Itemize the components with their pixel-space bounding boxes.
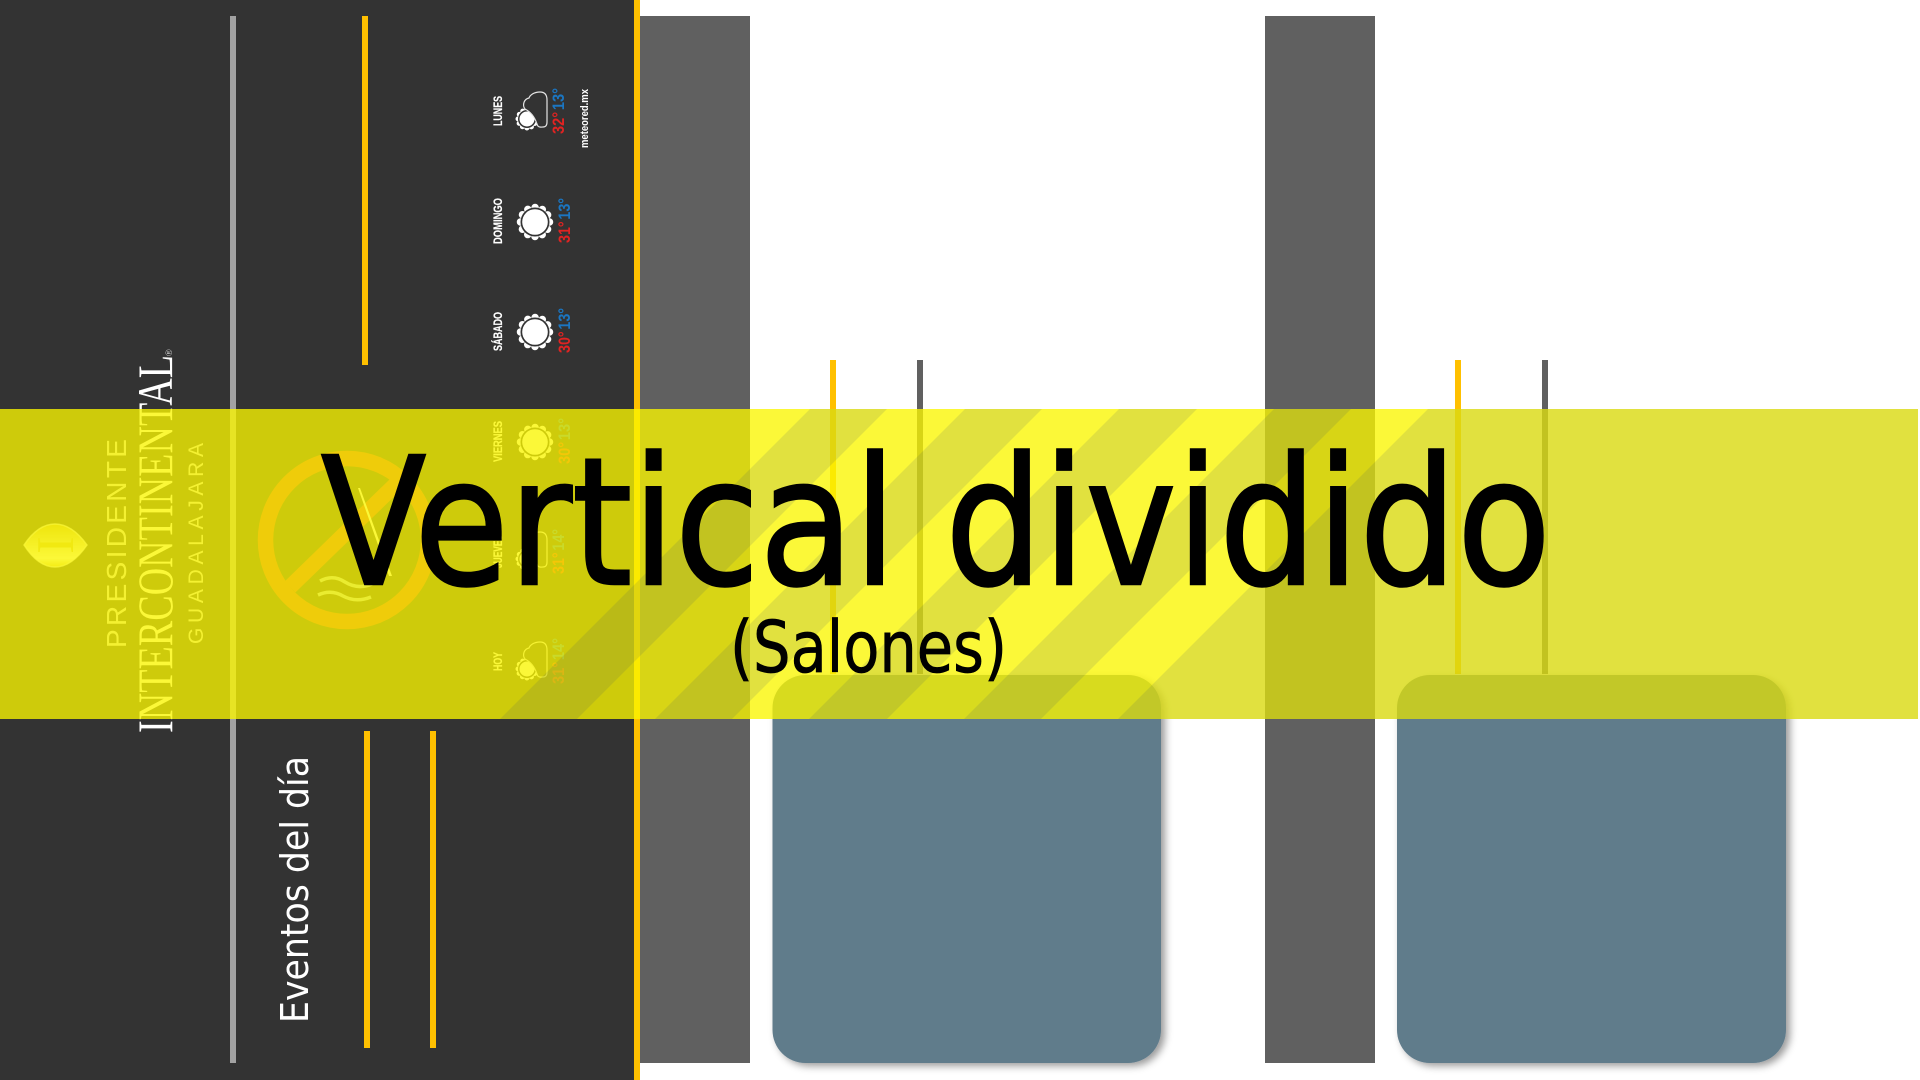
logo registered mark: ®	[164, 349, 174, 356]
subtitle: (Salones)	[730, 606, 1007, 689]
title: Vertical dividido	[321, 420, 1551, 626]
card: right hall	[1397, 675, 1786, 1063]
panel: grey column left	[640, 16, 750, 1063]
card: left hall	[772, 675, 1161, 1063]
weather: jueves: JUEVES	[491, 535, 505, 568]
line: left hall orange	[830, 360, 836, 674]
panel: grey column right	[1265, 16, 1375, 1063]
sidebar orange edge	[634, 0, 640, 1080]
weather: viernes	[491, 418, 574, 464]
panel: left dark sidebar	[0, 0, 634, 1080]
weather: sabado: 30°13°	[556, 308, 574, 353]
sidebar accent line bottom right	[430, 731, 436, 1048]
source: meteored: meteored.mx	[579, 88, 591, 148]
weather: hoy: HOY	[491, 652, 505, 671]
icon: logo emblem	[24, 524, 87, 567]
banner: translucent yellow band with stripes	[0, 409, 1918, 719]
line: left hall grey	[917, 360, 923, 674]
weather: jueves: 31°14°	[550, 529, 568, 574]
weather: lunes: 32°13°	[550, 88, 568, 134]
line: right hall grey	[1542, 360, 1548, 674]
logo text: presidente: PRESIDENTE	[101, 439, 132, 648]
weather: hoy	[491, 638, 568, 684]
weather: viernes: 30°13°	[556, 418, 574, 464]
weather: viernes: VIERNES	[491, 421, 505, 462]
sidebar divider line grey	[230, 16, 236, 1063]
weather: sabado: SÁBADO	[490, 312, 505, 351]
weather: jueves	[491, 529, 568, 574]
hotel logo	[24, 349, 208, 733]
weather: hoy: 31°14°	[550, 638, 568, 684]
weather: domingo: DOMINGO	[491, 198, 505, 244]
weather: lunes	[491, 88, 568, 134]
weather: lunes: LUNES	[491, 96, 505, 126]
icon: prohibition sign	[266, 458, 428, 622]
weather: sabado	[490, 308, 574, 353]
sidebar accent line bottom left	[364, 731, 370, 1048]
heading: eventos del dia: Eventos del día	[273, 756, 317, 1023]
icon: logo emblem: I	[27, 536, 85, 554]
line: right hall orange	[1455, 360, 1461, 674]
weather: domingo	[491, 198, 574, 244]
logo text: guadalajara: GUADALAJARA	[185, 443, 208, 644]
logo text: intercontinental: INTERCONTINENTAL	[127, 355, 183, 733]
weather: domingo: 31°13°	[556, 198, 574, 243]
sidebar accent line top	[362, 16, 368, 365]
